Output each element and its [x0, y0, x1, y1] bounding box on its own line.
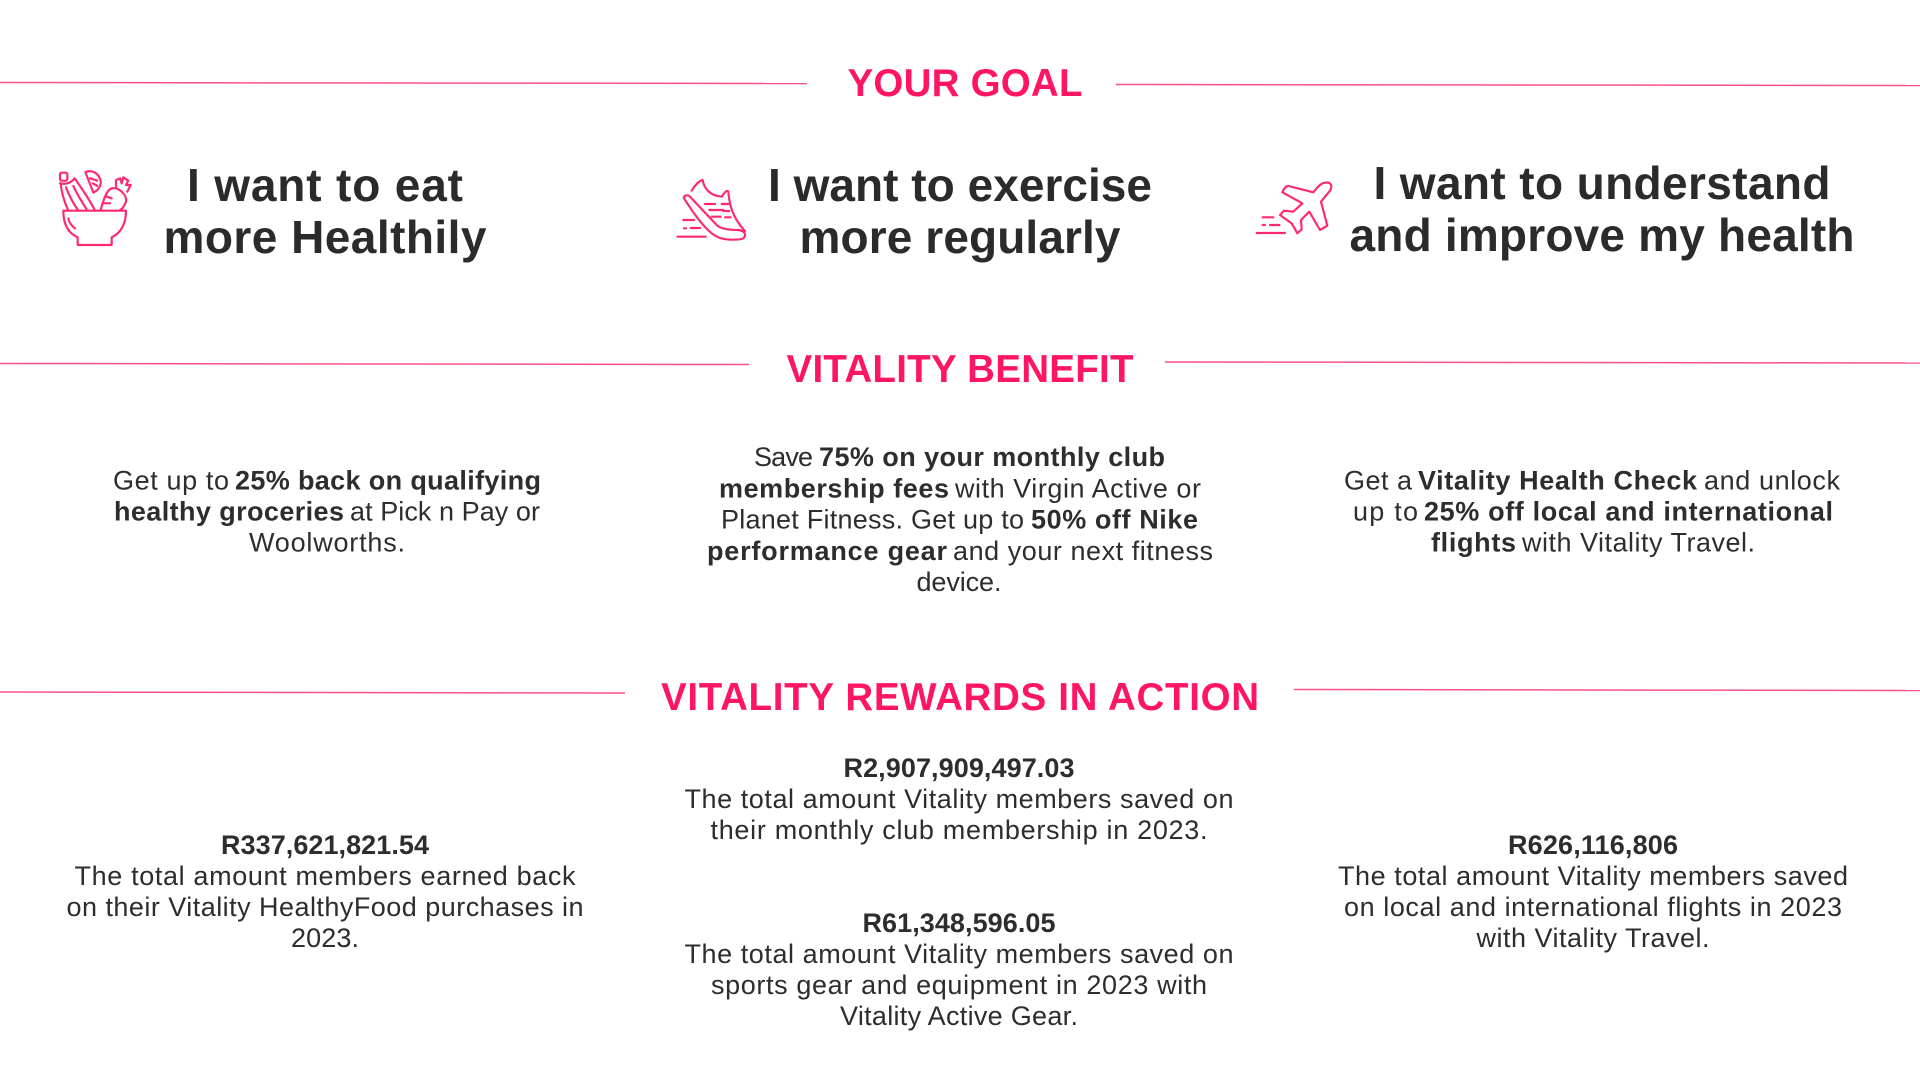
stat: healthy food savings: 2023. [291, 923, 359, 953]
text: fitness benefit: Planet Fitness. Get up to [721, 504, 1024, 534]
icon: healthy food bowl [60, 171, 131, 245]
text: healthy food benefit: Woolworths. [249, 528, 405, 558]
panel: vitality benefits [113, 442, 1840, 597]
goal: eat healthily: I want to eat [187, 159, 463, 211]
stat: sports gear savings [684, 908, 1234, 1031]
text: health check benefit [1344, 466, 1840, 558]
text: health check benefit: 25% off local and international [1424, 496, 1833, 526]
text: health check benefit: and unlock [1704, 466, 1840, 496]
stat: club membership savings: R2,907,909,497.03 [844, 753, 1074, 783]
heading: vitality rewards in action: VITALITY REWARDS IN ACTION [661, 676, 1259, 719]
text: health check benefit: Vitality Health Check [1418, 466, 1698, 496]
stat: sports gear savings: Vitality Active Gear. [840, 1001, 1078, 1031]
goal: understand health: I want to understand [1374, 157, 1830, 209]
stat: flight savings: The total amount Vitality members saved [1338, 861, 1848, 891]
stat: sports gear savings: sports gear and equipment in 2023 with [711, 970, 1207, 1000]
stat: flight savings: R626,116,806 [1508, 830, 1678, 860]
text: fitness benefit: performance gear [707, 536, 947, 566]
text: health check benefit: with Vitality Travel. [1521, 528, 1755, 558]
text: health check benefit: Get a [1344, 466, 1413, 496]
text: fitness benefit: and your next fitness [953, 536, 1213, 566]
panel: your goal options [60, 157, 1854, 263]
text: health check benefit: up to [1353, 496, 1418, 526]
heading: vitality benefit: VITALITY BENEFIT [786, 348, 1134, 391]
heading: your goal: YOUR GOAL [848, 62, 1082, 105]
stat: healthy food savings [66, 830, 584, 953]
goal: understand health: and improve my health [1350, 209, 1854, 261]
stat: club membership savings [684, 753, 1234, 845]
stat: healthy food savings: The total amount members earned back [74, 861, 576, 891]
goal: understand health [1350, 157, 1854, 261]
icon: running shoe [677, 180, 745, 240]
text: healthy food benefit: Get up to [113, 466, 229, 496]
stat: flight savings: on local and international flights in 2023 [1344, 892, 1842, 922]
text: fitness benefit: 50% off Nike [1031, 504, 1198, 534]
text: health check benefit: flights [1431, 528, 1516, 558]
goal: eat healthily [164, 159, 487, 263]
text: fitness benefit: 75% on your monthly club [819, 442, 1165, 472]
goal: eat healthily: more Healthily [164, 211, 487, 263]
stat: healthy food savings: R337,621,821.54 [221, 830, 429, 860]
stat: flight savings: with Vitality Travel. [1476, 923, 1710, 953]
goal: exercise regularly: more regularly [800, 211, 1121, 263]
stat: sports gear savings: The total amount Vitality members saved on [684, 939, 1234, 969]
text: fitness benefit: membership fees [719, 474, 949, 504]
icon: aeroplane [1257, 182, 1331, 233]
goal: exercise regularly: I want to exercise [768, 159, 1152, 211]
text: healthy food benefit [113, 466, 541, 558]
stat: flight savings [1338, 830, 1848, 953]
stat: club membership savings: their monthly club membership in 2023. [710, 815, 1208, 845]
stat: sports gear savings: R61,348,596.05 [862, 908, 1056, 938]
text: healthy food benefit: healthy groceries [114, 496, 344, 526]
stat: healthy food savings: on their Vitality HealthyFood purchases in [66, 892, 584, 922]
panel: rewards in action [66, 753, 1848, 1031]
text: fitness benefit [707, 442, 1213, 597]
text: fitness benefit: with Virgin Active or [954, 474, 1201, 504]
stat: club membership savings: The total amount Vitality members saved on [684, 784, 1234, 814]
text: fitness benefit: Save [754, 442, 813, 472]
text: healthy food benefit: 25% back on qualifying [235, 466, 541, 496]
goal: exercise regularly [768, 159, 1152, 263]
text: fitness benefit: device. [916, 567, 1002, 597]
text: healthy food benefit: at Pick n Pay or [350, 496, 540, 526]
